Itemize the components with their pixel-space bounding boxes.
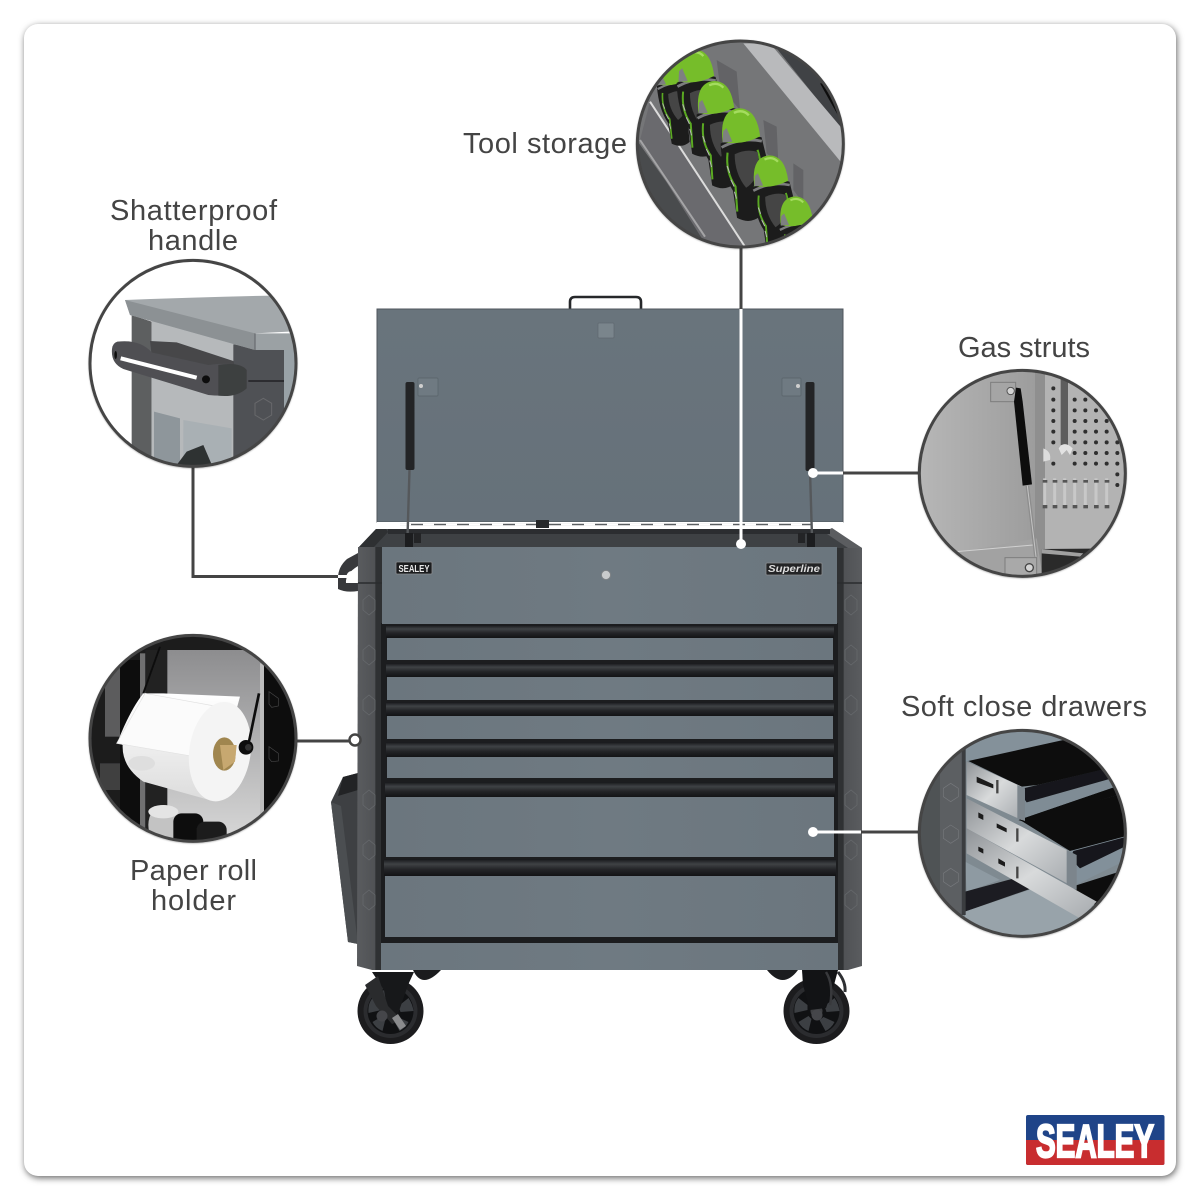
- leader end: [808, 827, 861, 837]
- leader line: [843, 472, 920, 474]
- leader end: [736, 309, 746, 549]
- gas strut: right: [782, 378, 815, 547]
- front left caster: [358, 972, 424, 1044]
- callout: paper roll holder: [87, 633, 361, 917]
- inner cabinet backing: [381, 623, 838, 943]
- leader line: [740, 245, 742, 309]
- leader end: [350, 734, 360, 746]
- callout: shatterproof handle: [87, 195, 358, 582]
- lid: [377, 297, 843, 528]
- callout: gas struts: [808, 332, 1130, 585]
- hinge strip: [377, 520, 843, 528]
- tool cabinet body: [357, 378, 862, 970]
- inset: handle: [87, 255, 300, 472]
- SEALEY badge: SEALEY: [398, 563, 430, 575]
- leader line: [861, 830, 920, 834]
- lid panel: [377, 309, 843, 522]
- rear casters: [413, 970, 798, 980]
- drawer 4: [386, 742, 834, 778]
- leader end: [338, 571, 358, 582]
- label: holder: [151, 885, 236, 917]
- label: Soft close drawers: [901, 691, 1147, 723]
- leader line: [295, 740, 350, 742]
- callout: tool storage: [463, 37, 850, 549]
- drawer 6: [384, 859, 836, 937]
- label: [130, 855, 257, 917]
- side pocket: [331, 773, 358, 944]
- side handle: [338, 553, 358, 592]
- lock: [601, 570, 611, 580]
- drawer 3: [386, 702, 834, 739]
- Superline Pro badge: Superline: [768, 564, 820, 575]
- left corner post: [357, 547, 382, 970]
- drawer 1: [386, 625, 834, 660]
- label: Shatterproof: [110, 195, 278, 227]
- top opening: [358, 529, 862, 548]
- inset: paper roll: [87, 633, 301, 852]
- leader line: [193, 465, 338, 576]
- drawer 5: [385, 782, 835, 857]
- drawer 2: [386, 663, 834, 700]
- top front panel: [382, 547, 837, 624]
- label: handle: [148, 225, 238, 257]
- inset: gas strut: [917, 368, 1130, 585]
- callout: soft close drawers: [808, 691, 1147, 945]
- lid catch: [598, 323, 614, 338]
- label: Tool storage: [463, 128, 627, 160]
- right corner post: [837, 548, 862, 970]
- lid handle: [570, 297, 641, 311]
- front right caster: [784, 970, 850, 1044]
- leader end: [808, 468, 843, 478]
- label: Paper roll: [130, 855, 257, 887]
- label: [110, 195, 278, 257]
- base panel: [381, 943, 838, 970]
- label: Gas struts: [958, 332, 1090, 364]
- inset: screwdrivers: [635, 40, 846, 250]
- gas strut: left: [405, 378, 438, 547]
- inset: drawers: [917, 728, 1130, 945]
